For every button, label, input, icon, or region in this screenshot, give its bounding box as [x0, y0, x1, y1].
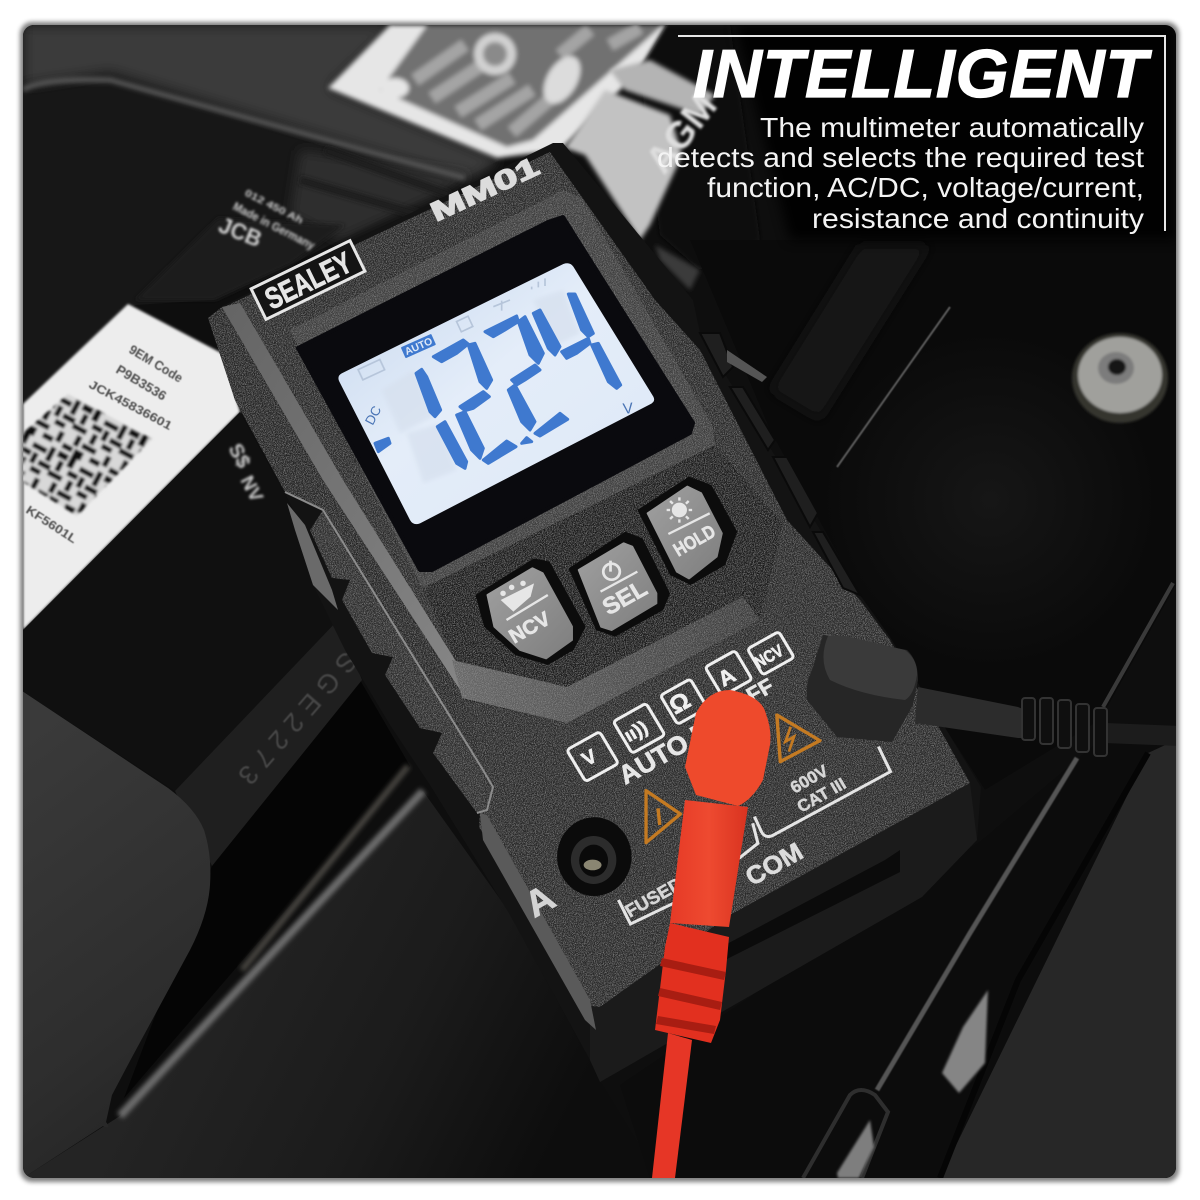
LCD background	[338, 263, 654, 524]
button panel and controls: FF	[742, 673, 778, 708]
background: mounting bolt	[1072, 333, 1168, 423]
button: NCV	[488, 568, 572, 658]
red probe collar	[655, 923, 729, 1043]
button panel and controls: CAT III	[794, 774, 849, 816]
body: lower rail plate	[310, 510, 487, 813]
body: screen surround band	[290, 190, 715, 588]
barcode matrix	[23, 394, 152, 516]
cable	[915, 687, 1030, 738]
background: white barcode label: P9B3536	[113, 362, 169, 403]
background: white barcode label: JCK45836601	[87, 377, 175, 433]
red collar ribs	[656, 958, 726, 1034]
LCD volts unit: V	[622, 400, 635, 418]
description text: resistance and continuity	[812, 203, 1144, 234]
red probe head	[685, 690, 770, 806]
multimeter body	[208, 143, 981, 1082]
background: black battery below label: NV	[236, 472, 267, 506]
LCD digits	[375, 294, 621, 468]
function icon labels	[578, 641, 787, 771]
background: white barcode label	[23, 304, 240, 630]
label: A jack: A	[517, 876, 562, 925]
button: HOLD	[648, 487, 722, 578]
body: left textured panel	[208, 307, 483, 770]
warning triangle: voltage	[777, 715, 820, 762]
LCD display reading 12.24 V	[338, 263, 654, 524]
warning triangle: fused input	[646, 791, 680, 843]
body: front face	[222, 152, 970, 1007]
background: JCB label text: 012 450 Ah	[243, 188, 305, 227]
function icon labels: NCV	[751, 641, 787, 672]
background: moulded ridge with code	[175, 620, 363, 866]
title: INTELLIGENT	[693, 36, 1152, 112]
body: side clip	[287, 503, 338, 610]
probe grip	[823, 635, 917, 700]
black test probe and cable	[807, 635, 1180, 756]
function icon labels: ıı))	[621, 717, 652, 747]
body: plate outline highlight	[285, 492, 493, 813]
button: NCV: NCV	[505, 608, 555, 648]
body: lower side wall	[590, 783, 977, 1082]
description text: detects and selects the required test	[657, 142, 1144, 173]
body: outer shell	[218, 143, 920, 687]
function icon labels: Ω	[665, 687, 696, 720]
background: right black cover	[759, 240, 951, 468]
label: AUTO POWER OFF: AUTO PO	[613, 706, 734, 790]
red lead wire	[652, 1033, 692, 1178]
LCD ghost status icons	[358, 278, 545, 380]
button: SEL	[579, 543, 656, 630]
model number: MM01	[426, 151, 544, 227]
dark button panel	[423, 445, 783, 723]
background: moulded ridge with code: SGE2273	[232, 646, 363, 790]
thin wire	[1105, 733, 1180, 736]
red test probe and lead	[652, 690, 770, 1178]
background: left plastic lobe	[22, 691, 210, 1178]
title frame lines	[678, 36, 1165, 231]
background: black battery below label	[23, 412, 266, 631]
background: lower plastic surface	[27, 763, 524, 1178]
LCD inactive digit ghosting	[400, 295, 577, 479]
probe head	[807, 635, 918, 742]
background: battery top left	[23, 25, 500, 410]
body: face lower edge strip	[480, 813, 596, 1030]
background: grey AGM battery sticker: AGM	[638, 86, 726, 182]
body: grey side tab	[727, 350, 767, 382]
button: HOLD: HOLD	[670, 522, 720, 561]
red probe body	[670, 800, 748, 927]
background: lower right cover with rails	[620, 583, 1176, 1178]
strain relief	[1022, 698, 1107, 756]
function icon boxes	[567, 631, 794, 782]
background: white barcode label: 9EM Code	[126, 342, 186, 385]
background: black battery below label: S$	[224, 440, 254, 472]
description text	[657, 112, 1144, 234]
background: JCB label text: Made in Germany	[231, 199, 317, 253]
background: grey AGM battery sticker	[564, 25, 718, 290]
background: JCB label text	[215, 188, 317, 253]
body: left grey rail	[222, 303, 462, 693]
background: JCB label text: JCB	[215, 212, 266, 252]
body: right side buttons	[700, 333, 860, 595]
textured bevel band	[452, 597, 760, 723]
function icon labels: A	[713, 662, 740, 691]
body: slot in lower wall	[725, 850, 900, 960]
rating outline box	[754, 747, 890, 837]
screen bezel	[298, 217, 693, 570]
background: top white label	[328, 25, 667, 158]
description text: function, AC/DC, voltage/current,	[707, 172, 1144, 203]
LCD DC indicator: DC	[362, 403, 385, 427]
background: black wedge channel	[124, 680, 410, 1098]
background: white barcode label: KF5601L	[23, 503, 80, 546]
rating text: 600V	[787, 761, 832, 797]
function icon labels: V	[578, 746, 601, 771]
logo: SEALEY: SEALEY	[260, 246, 357, 316]
label: COM: COM	[741, 838, 808, 892]
button wells	[475, 477, 737, 665]
LCD AUTO indicator: AUTO	[403, 336, 434, 358]
label: FUSED: FUSED	[621, 873, 686, 921]
button panel and controls	[475, 477, 890, 925]
input jack	[557, 817, 632, 896]
dark backdrop behind text	[735, 25, 1176, 240]
button: SEL: SEL	[598, 576, 652, 621]
fused outline	[618, 823, 758, 924]
description text: The multimeter automatically	[760, 112, 1144, 143]
